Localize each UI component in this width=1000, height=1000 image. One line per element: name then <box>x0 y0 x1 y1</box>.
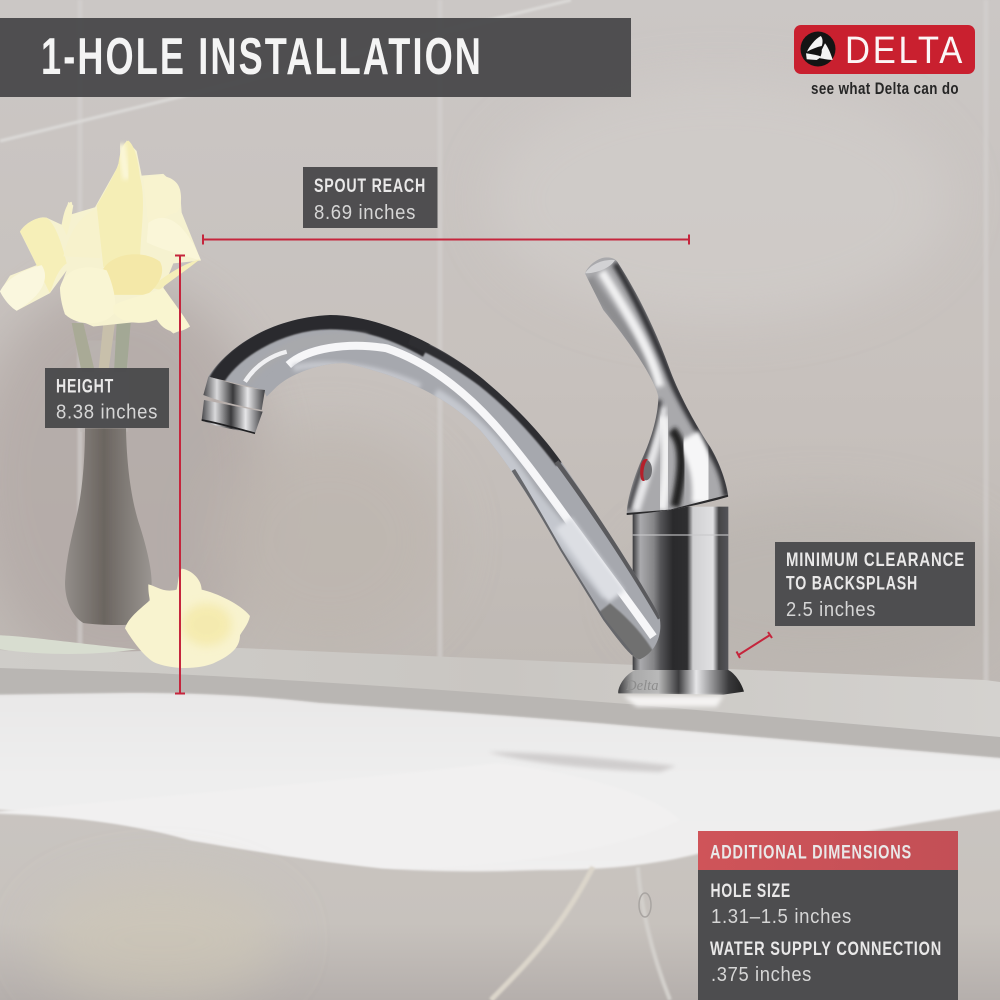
dimension line: height <box>175 256 185 694</box>
title banner <box>0 18 631 97</box>
indicator: red hot mark <box>640 460 652 480</box>
faucet base: Delta <box>625 678 659 694</box>
logo: Delta: see what Delta can do <box>811 80 959 98</box>
dimension: height label: 8.38 inches <box>56 402 158 424</box>
logo: Delta <box>794 25 975 98</box>
dimension line: clearance <box>736 632 772 658</box>
dimension: clearance label: TO BACKSPLASH <box>786 572 918 594</box>
panel: additional dimensions: HOLE SIZE <box>710 880 791 902</box>
flowers <box>0 141 250 668</box>
dimension: spout reach label: 8.69 inches <box>314 202 416 224</box>
dimension: clearance label <box>775 542 975 626</box>
dimension: spout reach label: SPOUT REACH <box>314 175 426 197</box>
faucet nozzle <box>202 377 265 433</box>
faucet base <box>618 670 744 707</box>
dimension: spout reach label <box>303 167 438 228</box>
sink basin <box>0 693 1000 1000</box>
dimension line: spout reach <box>203 234 689 244</box>
vase with stems <box>65 323 152 625</box>
title banner: 1-HOLE INSTALLATION <box>41 27 483 85</box>
panel header <box>698 831 958 870</box>
panel: additional dimensions <box>698 831 958 1000</box>
flower: upper daffodils <box>0 141 201 334</box>
icon: Delta triangle mark <box>800 32 836 66</box>
dimension: height label <box>45 368 169 428</box>
panel: additional dimensions: 1.31–1.5 inches <box>711 906 852 928</box>
dimension: height label: HEIGHT <box>56 376 114 398</box>
faucet body cylinder <box>633 507 728 670</box>
background: tiled wall <box>0 0 1000 700</box>
faucet spout <box>197 307 670 667</box>
logo: Delta: DELTA <box>845 30 965 72</box>
countertop surface <box>0 648 1000 737</box>
faucet handle <box>580 253 733 520</box>
dimension: clearance label: 2.5 inches <box>786 599 876 621</box>
flower: fallen daffodil <box>0 569 250 668</box>
panel header: ADDITIONAL DIMENSIONS <box>710 842 912 864</box>
countertop front lip <box>0 668 1000 758</box>
panel: additional dimensions: .375 inches <box>711 964 812 986</box>
faucet <box>197 253 744 707</box>
